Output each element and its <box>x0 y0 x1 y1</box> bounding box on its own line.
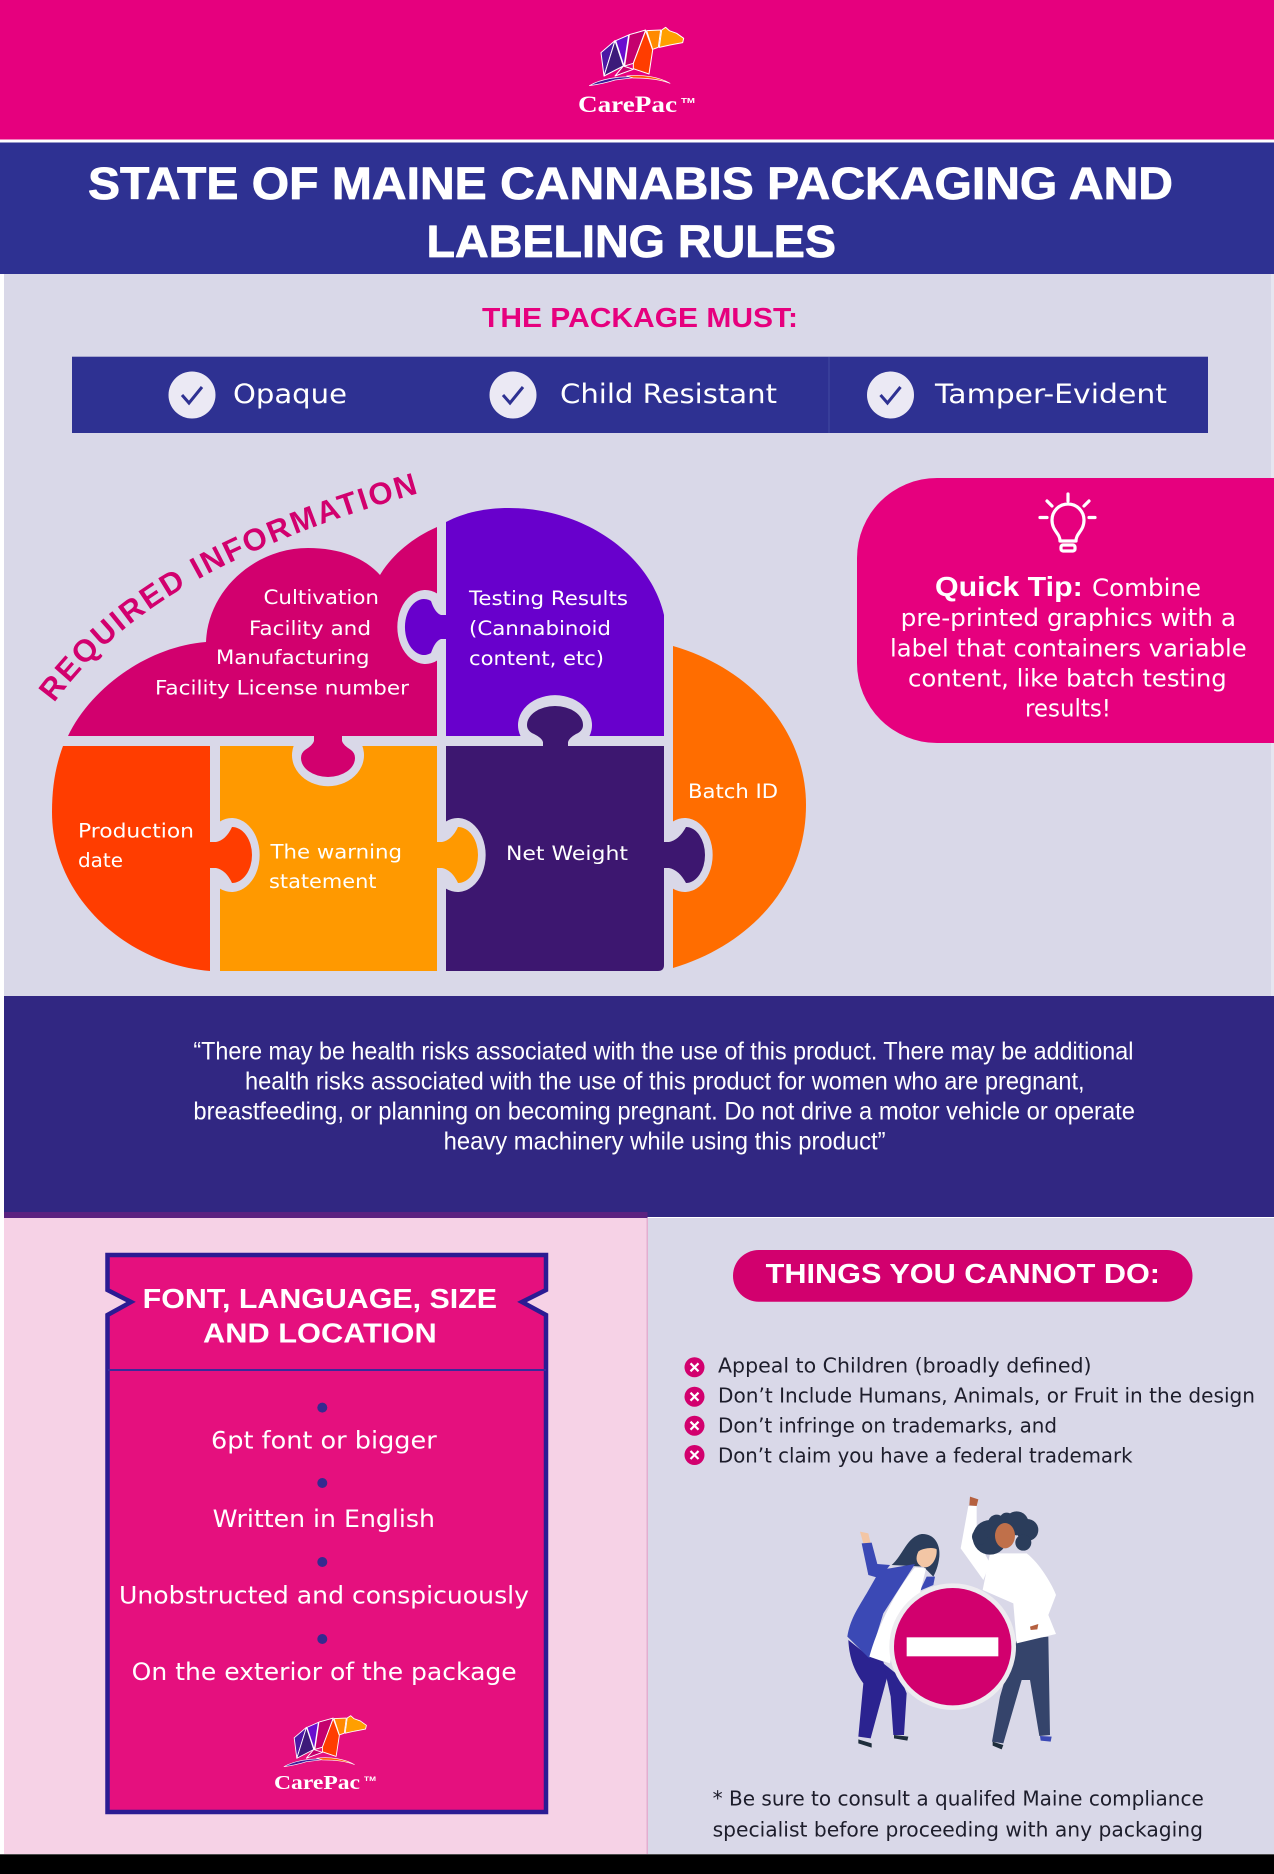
title: STATE OF MAINE CANNABIS PACKAGING AND <box>88 158 1173 209</box>
requirements list: Written in English <box>213 1505 435 1533</box>
requirements list: On the exterior of the package <box>132 1658 517 1686</box>
no-entry sign <box>889 1583 1016 1710</box>
icon: small CarePac logo <box>274 1716 376 1794</box>
piece: warning statement <box>220 735 437 971</box>
quote text: “There may be health risks associated with the use of this product. There may be additional <box>193 1037 1133 1065</box>
requirements list <box>119 1403 529 1686</box>
piece: net weight: Net Weight <box>506 842 628 865</box>
piece: cultivation license: Facility and <box>249 617 371 640</box>
piece: cultivation license: Cultivation <box>264 586 379 609</box>
quote text: health risks associated with the use of this product for women who are pregnant, <box>245 1067 1085 1095</box>
item: opaque: Opaque <box>233 379 347 410</box>
panel: font, language, size and location <box>4 1212 648 1854</box>
pill heading <box>733 1250 1192 1302</box>
piece: cultivation license: Facility License number <box>155 676 410 700</box>
footnote: specialist before proceeding with any packaging <box>713 1818 1203 1842</box>
icon: small CarePac logo: CarePac <box>274 1772 360 1794</box>
card heading: FONT, LANGUAGE, SIZE <box>143 1283 497 1314</box>
prohibitions list: Appeal to Children (broadly defined) <box>718 1353 1092 1377</box>
quote text: breastfeeding, or planning on becoming pregnant. Do not drive a motor vehicle or operate <box>193 1097 1135 1125</box>
tip text: Combine <box>1092 574 1201 602</box>
piece: batch id <box>673 646 806 968</box>
tip text: content, like batch testing <box>908 665 1227 693</box>
piece: net weight <box>436 695 713 971</box>
ribbon card <box>108 1255 546 1812</box>
pill heading: THINGS YOU CANNOT DO: <box>766 1258 1160 1289</box>
panel: warning quote band <box>4 996 1274 1217</box>
prohibitions list: Don’t Include Humans, Animals, or Fruit in the design <box>718 1383 1255 1407</box>
piece: batch id: Batch ID <box>688 780 778 803</box>
prohibitions list: Don’t infringe on trademarks, and <box>718 1413 1057 1437</box>
header band with logo <box>0 0 1274 140</box>
item: tamper-evident: Tamper-Evident <box>934 379 1167 410</box>
footnote <box>713 1787 1204 1842</box>
item: tamper-evident <box>867 372 1167 418</box>
callout: quick tip <box>857 478 1274 743</box>
footnote: * Be sure to consult a qualifed Maine compliance <box>713 1787 1204 1811</box>
left woman <box>847 1532 939 1748</box>
title <box>88 158 1173 267</box>
prohibitions list: Don’t claim you have a federal trademark <box>718 1443 1133 1467</box>
item: child resistant: Child Resistant <box>560 379 777 410</box>
item: opaque <box>168 372 347 418</box>
icon: CarePac bear logo <box>589 27 684 86</box>
piece: testing results <box>397 508 664 736</box>
card heading: AND LOCATION <box>203 1318 437 1349</box>
item: child resistant <box>490 372 777 418</box>
tip text: Quick Tip: <box>935 571 1083 602</box>
bottom black bar <box>0 1854 1274 1874</box>
icon: small CarePac logo: TM <box>364 1776 376 1783</box>
piece: production date <box>52 746 260 971</box>
piece: cultivation license: Manufacturing <box>216 646 370 669</box>
piece: cultivation license <box>68 527 437 736</box>
piece: warning statement: statement <box>269 870 377 893</box>
piece: warning statement: The warning <box>269 841 402 864</box>
tip text <box>890 571 1247 723</box>
piece: production date: Production <box>78 820 194 843</box>
heading: the package must: THE PACKAGE MUST: <box>482 302 798 333</box>
tip text: label that containers variable <box>890 635 1247 663</box>
piece: testing results: (Cannabinoid <box>469 617 611 640</box>
chart: puzzle cloud <box>52 508 806 971</box>
requirements list: Unobstructed and conspicuously <box>119 1582 529 1610</box>
tip text: results! <box>1025 695 1111 723</box>
title band <box>0 142 1274 274</box>
panel: package requirements bar <box>72 357 1208 433</box>
prohibitions list <box>684 1353 1255 1467</box>
card heading <box>143 1283 497 1349</box>
heading: required information: REQUIRED INFORMATION <box>38 473 417 702</box>
piece: testing results: content, etc) <box>469 647 604 670</box>
illustration: two women holding no-entry sign <box>847 1497 1056 1749</box>
requirements list: 6pt font or bigger <box>211 1427 437 1455</box>
quote text: heavy machinery while using this product” <box>444 1127 886 1155</box>
quote text <box>193 1037 1135 1155</box>
panel: things you cannot do <box>648 1218 1274 1854</box>
trademark: TM <box>681 96 695 105</box>
icon: light bulb <box>1040 494 1095 551</box>
piece: testing results: Testing Results <box>468 587 628 610</box>
logo wordmark: CarePac <box>578 92 677 117</box>
right woman <box>961 1497 1056 1749</box>
title: LABELING RULES <box>426 216 836 267</box>
tip text: pre-printed graphics with a <box>901 604 1236 632</box>
piece: production date: date <box>78 849 123 872</box>
